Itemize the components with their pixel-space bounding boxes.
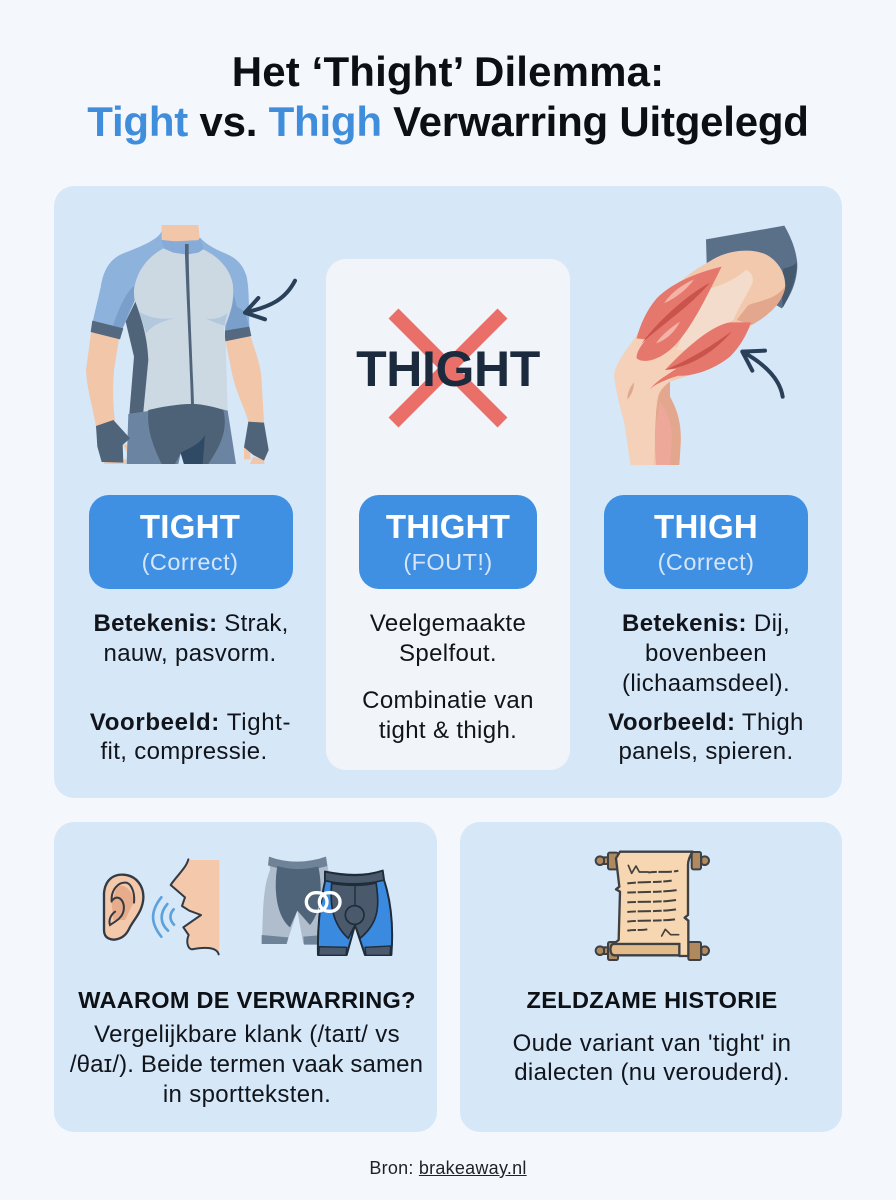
text: thight meaning — [370, 610, 526, 667]
text: tight example: Voorbeeld: Tight- — [90, 709, 291, 736]
text: tight meaning — [94, 610, 288, 667]
text: thigh example: Voorbeeld: Thigh — [608, 709, 804, 736]
heading: why the confusion: WAAROM DE VERWARRING? — [78, 987, 416, 1013]
panel: comparison — [54, 186, 842, 798]
text: tight meaning: Betekenis: Strak, — [94, 610, 288, 637]
button label: thigh: THIGH — [654, 508, 758, 545]
text: thigh meaning: Betekenis: Dij, — [622, 610, 790, 637]
button sublabel: thigh: (Correct) — [658, 549, 754, 575]
button label: thight: THIGHT — [386, 508, 510, 545]
panel: why the confusion — [54, 822, 437, 1132]
text: why the confusion: in sportteksten. — [163, 1081, 331, 1108]
text: thigh meaning: (lichaamsdeel). — [622, 670, 790, 697]
button: thight — [359, 495, 537, 589]
button: thigh — [604, 495, 808, 589]
text: thight explanation: Combinatie van — [362, 687, 534, 714]
text: tight example: fit, compressie. — [101, 738, 267, 765]
text: why the confusion: Vergelijkbare klank (/taɪt/ vs — [94, 1021, 400, 1048]
text: thight explanation: tight & thigh. — [379, 717, 517, 744]
button label: tight: TIGHT — [140, 508, 240, 545]
button: tight — [89, 495, 293, 589]
text: tight meaning: nauw, pasvorm. — [104, 640, 276, 667]
icon: ear and speaking face — [102, 858, 220, 956]
heading: rare history: ZELDZAME HISTORIE — [527, 987, 777, 1013]
text: rare history: dialecten (nu verouderd). — [514, 1059, 790, 1086]
text: thigh meaning — [622, 610, 790, 697]
title line 2: Tight vs. Thigh Verwarring Uitgelegd — [87, 98, 809, 145]
text: thigh meaning: bovenbeen — [645, 640, 767, 667]
button sublabel: thight: (FOUT!) — [403, 549, 493, 575]
button sublabel: tight: (Correct) — [142, 549, 238, 575]
text: thight meaning: Spelfout. — [399, 640, 497, 667]
misspelled word: THIGHT — [356, 341, 540, 397]
icon: cycling jersey with arrow — [86, 225, 298, 464]
text: rare history — [513, 1030, 791, 1086]
text: why the confusion — [70, 1021, 423, 1108]
icon: two linked cycling shorts — [262, 856, 394, 956]
panel: centre misspelling — [326, 259, 570, 770]
icon: crossed-out THIGHT — [356, 308, 540, 428]
icon: thigh muscle with arrow — [614, 226, 798, 465]
source: Bron: brakeaway.nl — [369, 1158, 527, 1178]
title — [87, 48, 809, 145]
text: thight meaning: Veelgemaakte — [370, 610, 526, 637]
text: tight example — [90, 709, 291, 765]
text: rare history: Oude variant van 'tight' in — [513, 1030, 791, 1057]
text: why the confusion: /θaɪ/). Beide termen vaak samen — [70, 1051, 423, 1078]
icon: parchment scroll — [594, 850, 710, 961]
red cross — [388, 308, 508, 428]
text: thigh example: panels, spieren. — [618, 738, 794, 765]
text: thigh example — [608, 709, 804, 765]
title line 1: Het ‘Thight’ Dilemma: — [232, 48, 664, 95]
text: thight explanation — [362, 687, 534, 744]
panel: rare history — [460, 822, 842, 1132]
